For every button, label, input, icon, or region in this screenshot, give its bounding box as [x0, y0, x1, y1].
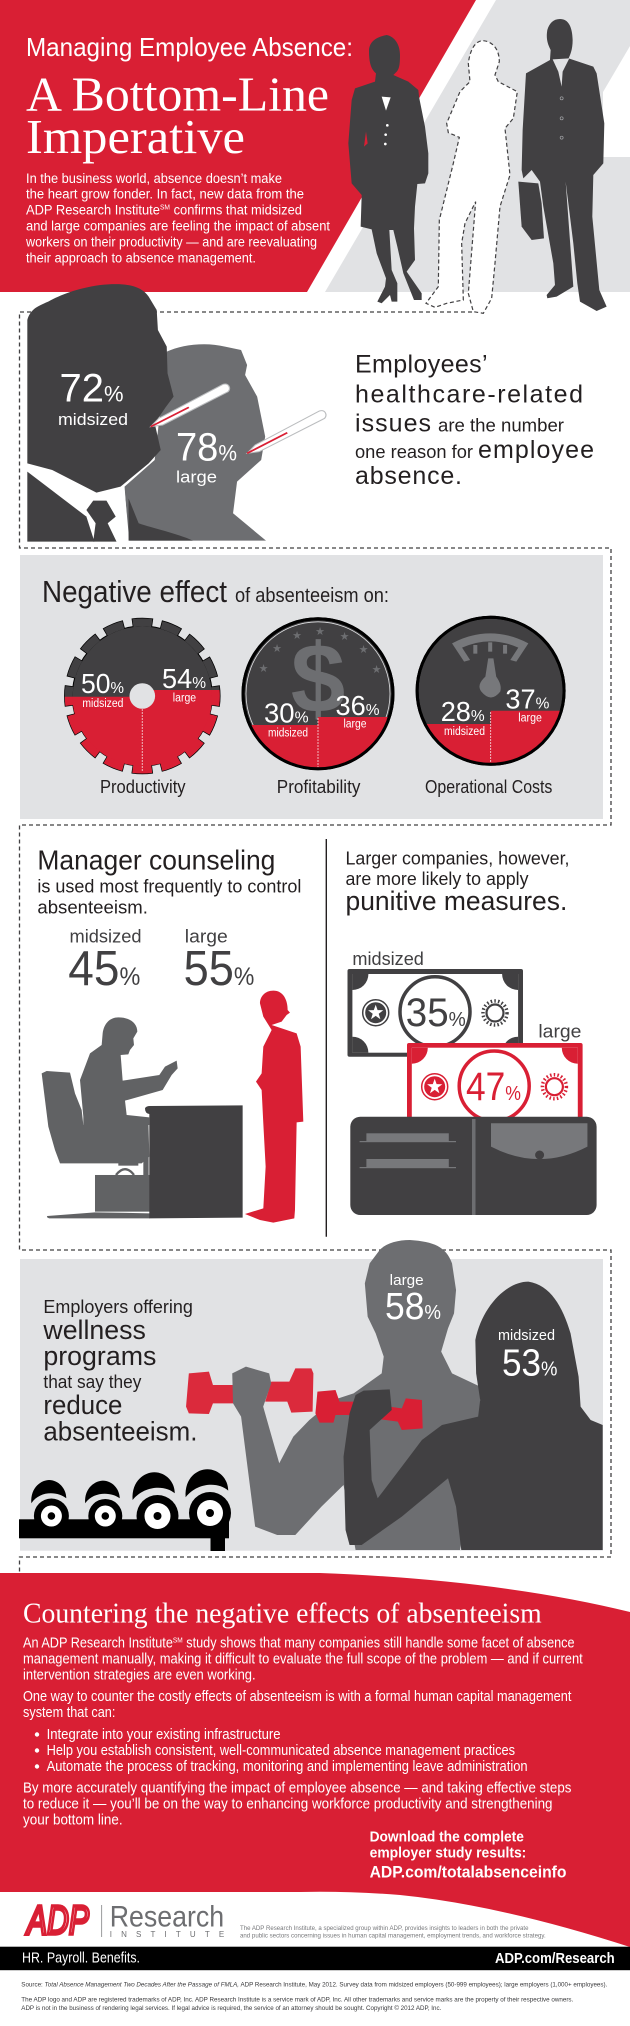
manager meeting scene	[42, 991, 303, 1223]
chart: operational costs dial: 28%	[441, 696, 485, 727]
stat: 53% midsized	[498, 1327, 558, 1385]
chart: profitability coin: ★	[272, 643, 282, 655]
paragraph one: SM	[173, 1635, 183, 1644]
hero background: red panel	[0, 0, 476, 292]
black tagline bar: ADP.com/Research	[495, 1950, 615, 1967]
chart: profitability coin: ★	[259, 663, 269, 675]
chart: operational costs dial: midsized	[444, 726, 485, 738]
wellness statement: that say they	[43, 1372, 141, 1392]
stat: 72% midsized: midsized	[58, 410, 128, 429]
legal note: ADP is not in the business of rendering legal services. If legal advice is required, the service of an attorney should be sought. Copyright © 2012 ADP, Inc.	[21, 2004, 441, 2012]
stat: 53% midsized: midsized	[498, 1327, 555, 1344]
healthcare statement: are the number	[438, 416, 564, 436]
chart: profitability coin: 36%	[336, 690, 380, 721]
stat: 78% large: large	[176, 468, 217, 487]
wellness statement: absenteeism.	[43, 1417, 197, 1447]
panel background	[20, 555, 603, 819]
healthcare statement: absence.	[355, 462, 462, 490]
intro paragraph: their approach to absence management.	[26, 250, 256, 266]
chart: profitability coin: ★	[315, 626, 325, 638]
dollar bill: large 47%: 47%	[466, 1065, 521, 1109]
panel: countering the negative effects	[0, 1573, 630, 1947]
chart: operational costs dial	[417, 617, 564, 764]
hero background: grey band	[325, 0, 630, 292]
panel: punitive measures	[346, 848, 597, 1215]
paragraph two: One way to counter the costly effects of absenteeism is with a formal human capital management	[23, 1689, 571, 1705]
chart: profitability coin: $	[291, 623, 345, 733]
chart: productivity gear	[69, 622, 216, 772]
healthcare statement: healthcare-related	[355, 381, 583, 409]
counseling heading: absenteeism.	[37, 898, 148, 918]
black tagline bar: HR. Payroll. Benefits.	[22, 1950, 140, 1967]
wellness statement	[42, 1297, 197, 1447]
wellness statement: wellness	[42, 1315, 146, 1345]
paragraph three: By more accurately quantifying the impact of employee absence — and taking effective steps	[23, 1781, 571, 1797]
label: profitability: Profitability	[277, 777, 360, 797]
stat: 58% large: large	[390, 1272, 424, 1289]
man silhouette with briefcase	[518, 19, 607, 311]
intro paragraph: ADP Research Institute	[26, 202, 166, 218]
chart: profitability coin: ★	[340, 631, 350, 643]
stat: 45% midsized: 45%	[68, 942, 140, 996]
woman silhouette	[348, 35, 428, 303]
punitive heading: are more likely to apply	[346, 869, 528, 889]
source note: Source: Total Absence Management Two Decades After the Passage of FMLA, ADP Research Institute, May 2012. Survey data from midsized employers (50-999 employees); large employers (1,000+ employees).	[21, 1982, 607, 1989]
counseling heading: is used most frequently to control	[37, 877, 301, 897]
counseling heading	[37, 844, 301, 918]
chart: profitability coin: 30%	[264, 698, 309, 729]
weight rack	[19, 1469, 231, 1551]
wellness statement: reduce	[43, 1390, 122, 1420]
bullet list: Automate the process of tracking, monitoring and implementing leave administration	[47, 1759, 528, 1775]
label: productivity: Productivity	[100, 777, 186, 797]
paragraph one: intervention strategies are even working.	[23, 1667, 256, 1683]
paragraph two	[23, 1689, 571, 1721]
paragraph one	[23, 1635, 583, 1683]
hero silhouettes	[348, 19, 607, 313]
healthcare statement	[355, 351, 594, 490]
label: midsized: midsized	[352, 949, 424, 969]
stat: 78% large: 78%	[176, 426, 237, 470]
label: large: large	[538, 1022, 581, 1042]
legal note: The ADP logo and ADP are registered trademarks of ADP, Inc. ADP Research Institute is a service mark of ADP, Inc. All other trademarks and service marks are the property of their respective owners.	[21, 1997, 573, 2004]
chart: productivity gear: midsized	[82, 698, 123, 710]
download callout: employer study results:	[370, 1845, 526, 1861]
stat: 72% midsized	[58, 367, 128, 429]
intro paragraph: confirms that midsized	[170, 202, 302, 218]
panel: negative effect of absenteeism	[20, 555, 603, 819]
footer logo: ADP Research Institute: INSTITUTE	[110, 1930, 224, 1939]
chart: profitability coin: ★	[372, 664, 382, 676]
title: main line 2: Imperative	[26, 109, 245, 164]
bullet list: Help you establish consistent, well-communicated absence management practices	[47, 1743, 515, 1759]
footer logo: ADP Research Institute: ADP	[25, 1897, 89, 1943]
healthcare statement: issues	[355, 410, 431, 438]
section heading: Countering the negative effects of absenteeism	[23, 1597, 542, 1629]
chart: productivity gear: 50%	[81, 668, 124, 699]
panel heading: Negative effect	[42, 574, 227, 609]
wellness statement: Employers offering	[43, 1297, 193, 1317]
stat: 55% large: large	[185, 927, 228, 947]
stat: 58% large: 58%	[385, 1286, 441, 1328]
wellness statement: programs	[43, 1341, 156, 1371]
download callout: Download the complete	[370, 1830, 524, 1846]
chart: profitability coin: midsized	[268, 728, 308, 740]
panel: wellness programs	[19, 1240, 603, 1551]
paragraph three: your bottom line.	[23, 1813, 123, 1829]
stat: 45% midsized: midsized	[70, 927, 142, 947]
punitive heading: Larger companies, however,	[346, 848, 570, 868]
wallet	[350, 1117, 597, 1215]
download callout	[370, 1830, 566, 1881]
paragraph one: An ADP Research Institute	[23, 1635, 194, 1651]
dollar bill: midsized 35%	[348, 969, 523, 1057]
dollar bill: midsized 35%: 35%	[406, 991, 466, 1035]
legal note	[21, 1997, 573, 2012]
hero title and intro	[25, 32, 353, 266]
institute description	[240, 1925, 546, 1940]
chart: productivity gear: large	[173, 693, 196, 705]
chart: profitability coin	[243, 619, 393, 769]
label: operational costs: Operational Costs	[425, 777, 552, 797]
punitive heading: punitive measures.	[346, 886, 567, 916]
chart: profitability coin: ★	[292, 630, 302, 642]
paragraph three: to reduce it — you’ll be on the way to enhancing workforce productivity and strengthening	[23, 1797, 552, 1813]
healthcare statement: one reason for	[355, 442, 473, 462]
bullet list	[35, 1727, 528, 1775]
institute description: and public sectors concerning issues in human capital management, employment trends, and workforce strategy.	[240, 1933, 546, 1940]
divider between counseling and punitive measures	[325, 839, 327, 1237]
exercisers with dumbbells	[186, 1240, 603, 1550]
panel heading: of absenteeism on:	[235, 585, 389, 607]
stat: 53% midsized: 53%	[502, 1343, 558, 1385]
intro paragraph: In the business world, absence doesn’t make	[26, 171, 282, 186]
download callout: ADP.com/totalabsenceinfo	[370, 1862, 566, 1881]
intro paragraph: the heart grow fonder. In fact, new data from the	[26, 186, 304, 202]
punitive heading	[346, 848, 570, 916]
panel: manager counseling	[37, 844, 303, 1223]
footer logo: ADP Research Institute: Research	[110, 1901, 224, 1934]
chart: profitability coin: large	[344, 719, 366, 731]
two head silhouettes with thermometers	[27, 284, 326, 542]
hero background: white notch	[603, 46, 630, 157]
dollar bill: large 47%	[407, 1043, 583, 1123]
panel: healthcare issues	[27, 284, 594, 542]
chart: operational costs dial: large	[518, 713, 542, 725]
red curved background	[0, 1573, 630, 1947]
panel heading	[42, 574, 389, 609]
stat: 72% midsized: 72%	[60, 367, 124, 411]
intro paragraph: and large companies are feeling the impact of absent	[26, 218, 330, 234]
dashed connector frame	[20, 312, 611, 1573]
absent employee dashed outline	[426, 41, 517, 313]
paragraph two: system that can:	[23, 1705, 115, 1721]
footer logo: ADP Research Institute	[25, 1897, 224, 1943]
title: overline: Managing Employee Absence:	[26, 32, 353, 62]
panel background	[20, 1259, 603, 1551]
black tagline bar	[0, 1947, 630, 1970]
counseling heading: Manager counseling	[37, 844, 275, 875]
stat: 55% large: 55%	[184, 942, 254, 996]
healthcare statement: employee	[478, 436, 594, 464]
chart: productivity gear: 54%	[162, 663, 206, 694]
intro paragraph: SM	[160, 204, 170, 212]
paragraph three	[23, 1781, 571, 1829]
healthcare statement: Employees’	[355, 351, 488, 379]
intro paragraph	[25, 171, 330, 266]
institute description: The ADP Research Institute, a specialized group within ADP, provides insights to leaders in both the private	[240, 1925, 529, 1932]
chart: operational costs dial: 37%	[505, 683, 549, 714]
chart: profitability coin: ★	[359, 644, 369, 656]
paragraph one: study shows that many companies still handle some facet of absence	[183, 1635, 575, 1651]
title: main line 1: A Bottom-Line	[26, 67, 329, 122]
bullet list: Integrate into your existing infrastructure	[47, 1727, 281, 1743]
intro paragraph: workers on their productivity — and are reevaluating	[25, 234, 317, 250]
